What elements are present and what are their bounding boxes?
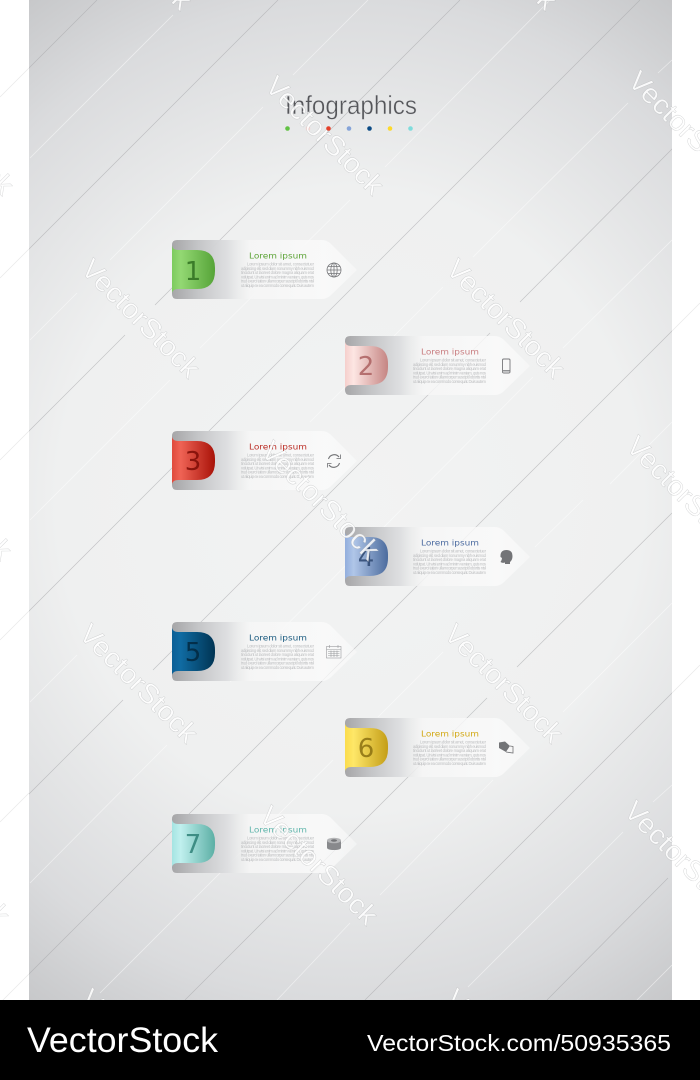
watermarks: VectorStock <box>440 253 572 384</box>
panel: step 1: tincidunt ut laoreet dolore magna aliquam erat <box>241 270 315 275</box>
panel: step 7: Lorem ipsum dolor sit amet, consectetuer <box>247 836 315 840</box>
panel: step 6: tincidunt ut laoreet dolore magna aliquam erat <box>413 748 487 753</box>
panel: step 4 <box>345 527 530 586</box>
panel: step 6: trud exerci tation ullamcorper suscipit lobortis nisl <box>413 756 486 762</box>
panel: step 6: Lorem ipsum <box>421 730 479 738</box>
panel: step 6: 6 <box>358 734 374 764</box>
panel: step 3: 3 <box>185 447 201 477</box>
panel: step 4: Lorem ipsum dolor sit amet, consectetuer <box>420 548 487 554</box>
panel: step 6 <box>345 718 530 777</box>
panel: step 4: Lorem ipsum <box>421 538 479 548</box>
watermarks: VectorStock <box>259 70 391 201</box>
panel: step 1: trud exerci tation ullamcorper suscipit lobortis nisl <box>241 278 314 284</box>
watermarks: VectorStock <box>438 618 570 749</box>
panel: step 3: volutpat. Ut wisi enim ad minim veniam, quis nos <box>241 465 314 470</box>
panel: step 5: volutpat. Ut wisi enim ad minim veniam, quis nos <box>241 656 314 661</box>
panel: step 3: Lorem ipsum dolor sit amet, consectetuer <box>247 452 315 458</box>
panel: step 2: adipiscing elit, sed diam nonummy nibh euismod <box>413 362 487 367</box>
panel: step 6: volutpat. Ut wisi enim ad minim veniam, quis nos <box>413 752 486 757</box>
legend dots <box>285 126 413 131</box>
panel: step 5: tincidunt ut laoreet dolore magna aliquam erat <box>241 652 315 657</box>
footer bar: VectorStock.com/50935365 <box>367 1030 671 1056</box>
footer bar <box>0 1000 700 1080</box>
panel: step 4: adipiscing elit, sed diam nonummy nibh euismod <box>413 553 487 558</box>
panel: step 5: 5 <box>185 638 201 668</box>
panel: step 5: ut aliquip ex ea commodo consequat. Duis autem <box>241 665 314 670</box>
panel: step 5: trud exerci tation ullamcorper suscipit lobortis nisl <box>241 660 314 666</box>
panel: step 1: 1 <box>185 257 201 287</box>
panel: step 4: volutpat. Ut wisi enim ad minim veniam, quis nos <box>413 561 486 566</box>
panel: step 6: ut aliquip ex ea commodo consequat. Duis autem <box>413 761 486 766</box>
panel: step 5: Lorem ipsum <box>249 634 307 642</box>
panel: step 7: Lorem ipsum <box>249 826 307 834</box>
panel: step 3: Lorem ipsum <box>249 442 307 452</box>
panel: step 4: tincidunt ut laoreet dolore magna aliquam erat <box>413 557 487 562</box>
panel: step 3: ut aliquip ex ea commodo consequat. Duis autem <box>241 474 314 479</box>
panel: step 3: adipiscing elit, sed diam nonummy nibh euismod <box>241 457 315 462</box>
panel: step 7: volutpat. Ut wisi enim ad minim veniam, quis nos <box>241 848 314 853</box>
watermarks: VectorStock <box>75 253 207 384</box>
panel: step 7: 7 <box>185 830 201 860</box>
panel: step 1: Lorem ipsum <box>249 252 307 260</box>
panel: step 4: 4 <box>358 543 374 573</box>
panel: step 3: trud exerci tation ullamcorper suscipit lobortis nisl <box>241 470 314 474</box>
title: Infographics <box>285 90 417 120</box>
panel: step 2: Lorem ipsum <box>421 348 479 356</box>
panel: step 3: tincidunt ut laoreet dolore magna aliquam erat <box>241 461 315 466</box>
panel: step 7: trud exerci tation ullamcorper suscipit lobortis nisl <box>241 852 314 858</box>
panel: step 7: tincidunt ut laoreet dolore magna aliquam erat <box>241 844 315 849</box>
panel: step 2 <box>345 336 530 395</box>
footer bar: VectorStock <box>27 1021 219 1060</box>
panel: step 3 <box>172 431 357 490</box>
panel: step 2: tincidunt ut laoreet dolore magna aliquam erat <box>413 366 487 371</box>
panel: step 7: ut aliquip ex ea commodo consequat. Duis autem <box>241 857 314 862</box>
panel: step 4: ut aliquip ex ea commodo consequat. Duis autem <box>413 570 486 575</box>
panel: step 2: 2 <box>358 352 374 382</box>
panel: step 1: ut aliquip ex ea commodo consequat. Duis autem <box>241 283 314 288</box>
panel: step 1: Lorem ipsum dolor sit amet, consectetuer <box>247 262 315 266</box>
panel: step 2: volutpat. Ut wisi enim ad minim veniam, quis nos <box>413 370 486 375</box>
panel: step 2: Lorem ipsum dolor sit amet, consectetuer <box>420 358 487 362</box>
watermarks: VectorStock <box>253 800 385 931</box>
panel: step 7: adipiscing elit, sed diam nonummy nibh euismod <box>241 840 315 845</box>
panel: step 7 <box>172 814 357 873</box>
watermarks: VectorStock <box>73 618 205 749</box>
panel: step 1: volutpat. Ut wisi enim ad minim veniam, quis nos <box>241 274 314 279</box>
panel: step 2: ut aliquip ex ea commodo consequat. Duis autem <box>413 379 486 384</box>
watermarks: VectorStock <box>255 435 387 566</box>
panel: step 6: Lorem ipsum dolor sit amet, consectetuer <box>420 740 487 744</box>
panel: step 6: adipiscing elit, sed diam nonummy nibh euismod <box>413 744 487 749</box>
panel: step 1: adipiscing elit, sed diam nonummy nibh euismod <box>241 266 315 271</box>
panel: step 1 <box>172 240 357 299</box>
panel: step 5 <box>172 622 357 681</box>
panel: step 5: Lorem ipsum dolor sit amet, consectetuer <box>247 644 315 648</box>
panel: step 2: trud exerci tation ullamcorper suscipit lobortis nisl <box>413 374 486 380</box>
panel: step 5: adipiscing elit, sed diam nonummy nibh euismod <box>241 648 315 653</box>
panel: step 4: trud exerci tation ullamcorper suscipit lobortis nisl <box>413 566 486 570</box>
